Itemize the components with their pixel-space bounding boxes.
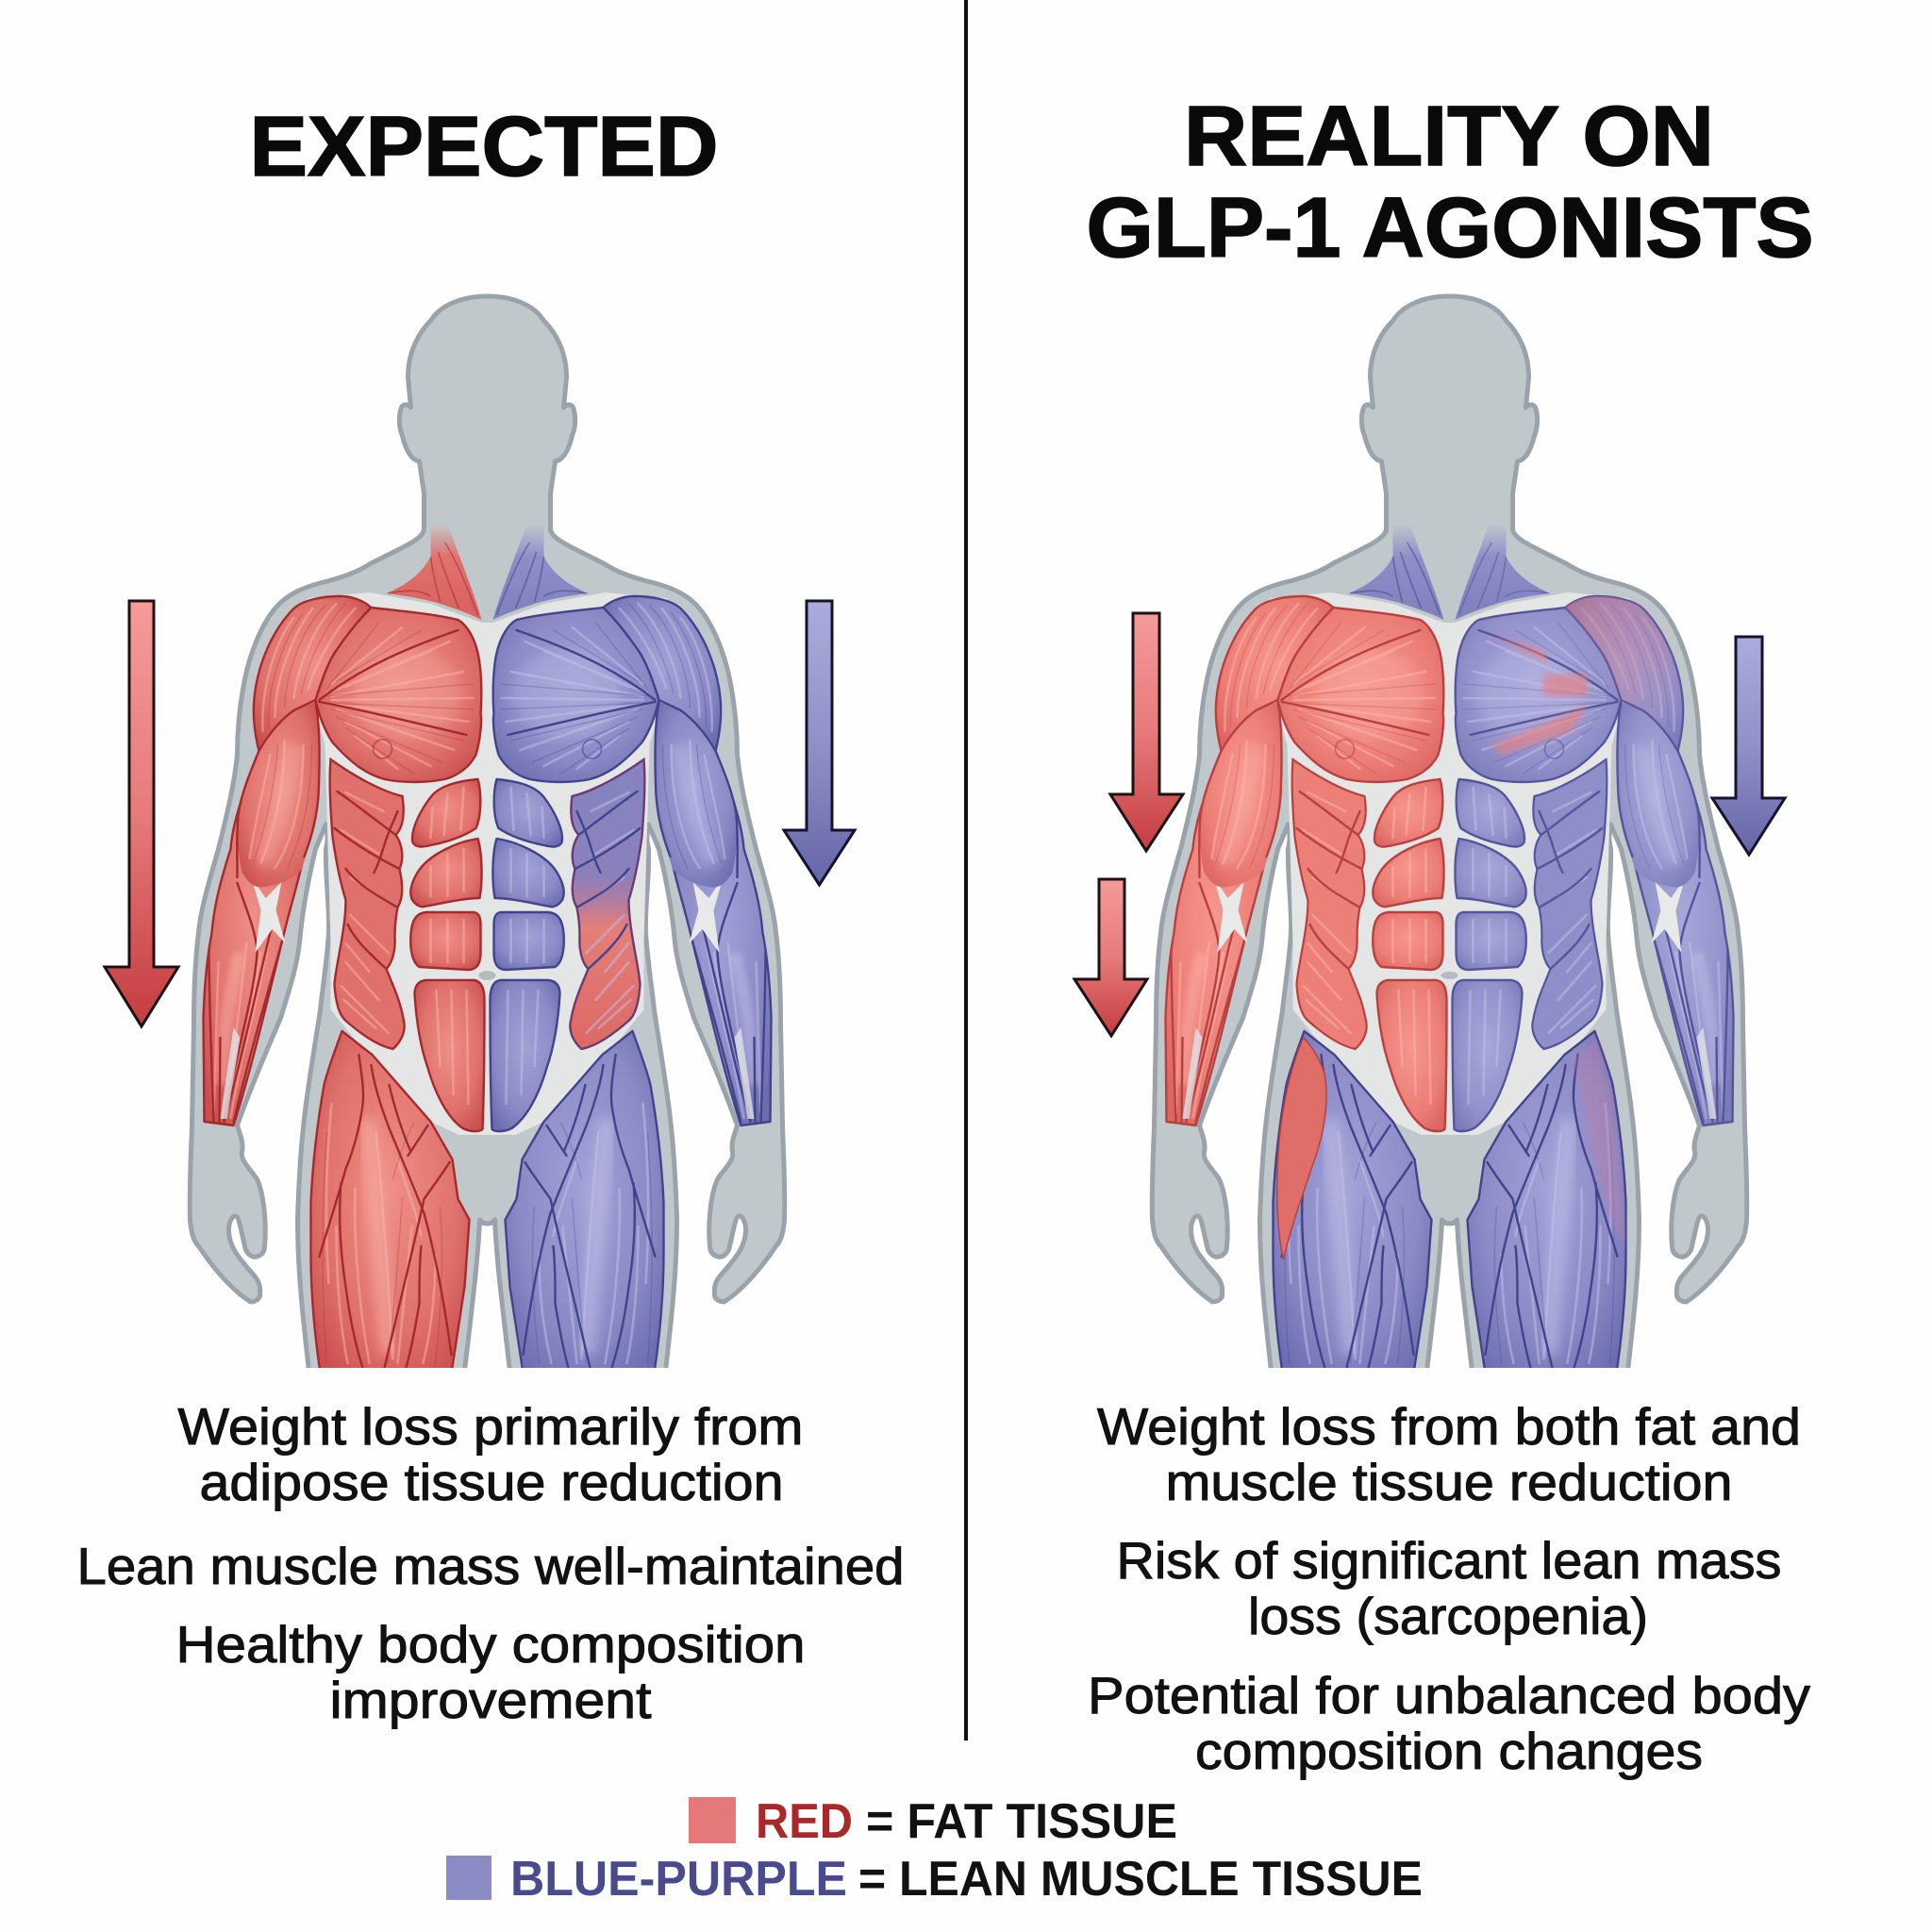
legend label: blue-purple: BLUE-PURPLE: [510, 1852, 847, 1907]
red overlay on pectoral: [1492, 635, 1587, 755]
arrow: expected fat loss: [105, 601, 178, 1026]
text block: expected outcomes: improvement: [330, 1671, 651, 1729]
muscles: red fat side: [204, 524, 485, 1379]
legend swatch: blue: [446, 1856, 491, 1900]
legend label: fat tissue: = FAT TISSUE: [866, 1794, 1177, 1849]
legend swatch: red: [689, 1797, 736, 1843]
legend: [446, 1794, 1423, 1907]
arrow: reality fat loss: [1110, 613, 1183, 851]
title: expected: EXPECTED: [249, 100, 719, 194]
title: reality on GLP-1 agonists: GLP-1 AGONISTS: [1087, 181, 1813, 275]
purple overlay on outer thigh: [1574, 1038, 1626, 1248]
legend label: lean muscle tissue: = LEAN MUSCLE TISSUE: [858, 1852, 1423, 1907]
body diagram: reality: [1152, 296, 1747, 1379]
text block: expected outcomes: Healthy body composition: [175, 1615, 806, 1674]
arrow: expected lean loss: [784, 601, 855, 885]
text block: reality outcomes: [1088, 1397, 1811, 1780]
red overlay on deltoid: [1566, 596, 1683, 730]
text block: reality outcomes: Weight loss from both fat and: [1097, 1397, 1801, 1456]
navel: [1441, 972, 1458, 979]
muscles: blue lean side with red infiltration: [1453, 524, 1734, 1379]
body diagram: expected: [190, 296, 785, 1379]
text block: reality outcomes: composition changes: [1195, 1722, 1703, 1780]
title: reality on GLP-1 agonists: [1087, 90, 1813, 275]
text block: expected outcomes: [77, 1397, 904, 1729]
red outer thigh fat: [1277, 1038, 1326, 1259]
text block: reality outcomes: Risk of significant lean mass: [1117, 1531, 1781, 1590]
navel: [479, 971, 496, 980]
text block: reality outcomes: muscle tissue reduction: [1166, 1453, 1732, 1511]
legend label: red: RED: [756, 1794, 853, 1849]
muscles: blue lean side: [491, 524, 772, 1379]
text block: expected outcomes: Weight loss primarily from: [177, 1397, 804, 1456]
arrow: reality lean loss: [1712, 637, 1785, 855]
title: reality on GLP-1 agonists: REALITY ON: [1184, 90, 1714, 184]
text block: reality outcomes: Potential for unbalanced body: [1088, 1666, 1811, 1724]
text block: expected outcomes: adipose tissue reduction: [200, 1453, 783, 1511]
arrow: reality additional loss: [1074, 879, 1147, 1036]
muscles: red fat side with blue thigh: [1166, 524, 1447, 1379]
text block: expected outcomes: Lean muscle mass well-maintained: [77, 1537, 904, 1595]
text block: reality outcomes: loss (sarcopenia): [1248, 1587, 1648, 1645]
center divider: [964, 0, 968, 1740]
